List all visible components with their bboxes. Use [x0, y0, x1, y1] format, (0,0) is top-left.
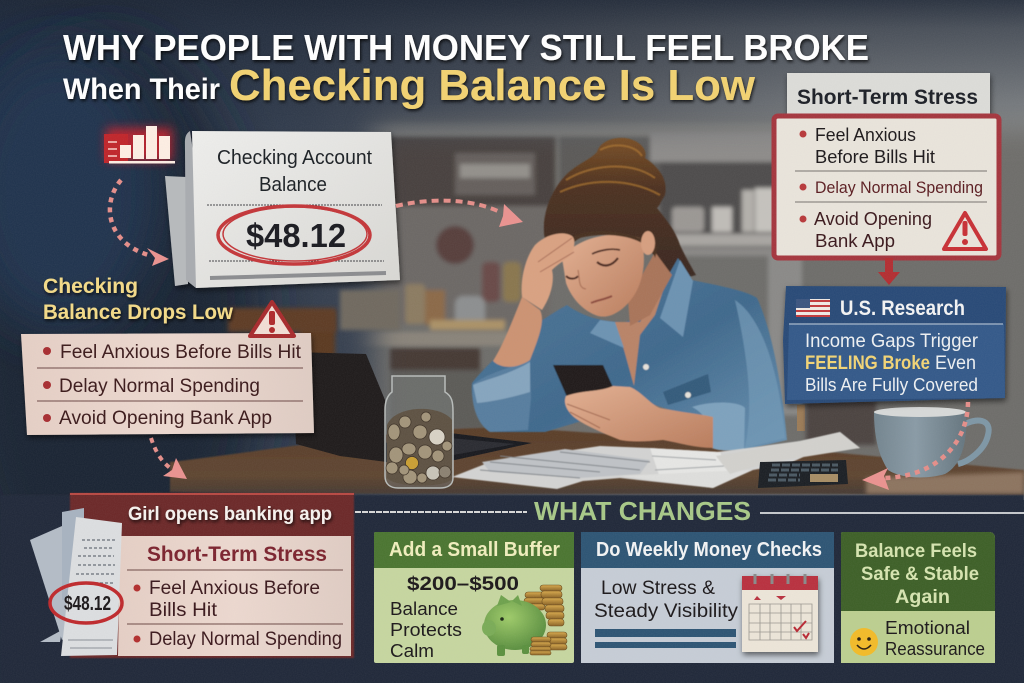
- title line 2 lead: When Their: [63, 73, 220, 106]
- receipts with circled balance: [30, 508, 122, 656]
- card: add a small buffer: Protects: [390, 620, 462, 640]
- panel: U.S. research: Even: [935, 353, 976, 374]
- panel: checking account balance receipt: Balance: [259, 174, 327, 196]
- card: do weekly money checks: [581, 532, 834, 663]
- label: Checking Account: [217, 147, 372, 169]
- card: do weekly money checks: Do Weekly Money Checks: [596, 539, 822, 561]
- card: do weekly money checks: Steady Visibility: [594, 601, 739, 622]
- heading: checking balance drops low: [43, 275, 234, 324]
- card: add a small buffer: $200–$500: [407, 574, 519, 595]
- arrow: receipt to woman: [396, 201, 523, 227]
- title line 1: WHY PEOPLE WITH MONEY STILL FEEL BROKE: [63, 27, 869, 68]
- paper curl: [185, 131, 200, 288]
- calculator: [758, 460, 848, 488]
- hand-drawn red circle: [218, 206, 370, 264]
- card: balance feels safe and stable: Again: [895, 587, 950, 608]
- card: do weekly money checks: Low Stress &: [601, 578, 715, 599]
- neck shadow: [628, 252, 672, 326]
- card: add a small buffer: [374, 532, 574, 663]
- short-term stress card: Feel Anxious Before: [149, 578, 320, 599]
- eyes, brow and mouth: [566, 249, 620, 303]
- panel: symptoms list: Delay Normal Spending: [59, 376, 260, 397]
- icon: smiley face: [850, 628, 878, 656]
- panel: U.S. research: Bills Are Fully Covered: [805, 375, 978, 395]
- heading: checking balance drops low: Balance Drops Low: [43, 301, 234, 324]
- hand and forearm holding phone: [565, 386, 713, 448]
- card: balance feels safe and stable: Balance Feels: [855, 541, 977, 562]
- panel: short-term stress list: Bank App: [815, 231, 895, 251]
- card: balance feels safe and stable: Reassurance: [885, 639, 985, 659]
- tab: short-term stress: [787, 73, 990, 115]
- ear: [641, 231, 655, 255]
- open collar skin: [614, 276, 668, 386]
- hair highlights: [560, 145, 660, 195]
- scattered bills and papers: [452, 432, 860, 489]
- shirt buttons: [643, 364, 691, 398]
- panel: short-term stress list: Before Bills Hit: [815, 147, 935, 167]
- hand on forehead: [522, 233, 574, 310]
- amount: $48.12: [246, 217, 346, 254]
- coffee mug: [874, 407, 989, 477]
- receipt paper: [192, 131, 400, 288]
- face: [562, 235, 644, 317]
- panel: short-term stress list: [774, 116, 999, 258]
- panel: U.S. research: Income Gaps Trigger: [805, 331, 979, 352]
- panel: girl opens banking app: [70, 493, 354, 658]
- panel: symptoms list: Avoid Opening Bank App: [59, 408, 272, 429]
- card: balance feels safe and stable: [841, 532, 995, 663]
- left rolled sleeve: [472, 360, 531, 432]
- front hair over forehead: [552, 231, 657, 258]
- coin jar: [385, 376, 453, 488]
- short-term stress card: Bills Hit: [149, 600, 218, 621]
- heading: checking balance drops low: Checking: [43, 275, 138, 298]
- card: balance feels safe and stable: Safe & Stable: [861, 564, 979, 585]
- back page: [165, 176, 188, 286]
- panel: checking account balance receipt: [165, 131, 400, 288]
- heading: what changes: WHAT CHANGES: [534, 496, 751, 526]
- panel: girl opens banking app: Girl opens banking app: [128, 504, 332, 525]
- short-term stress card: Short-Term Stress: [147, 543, 327, 566]
- shirt collar: [590, 260, 693, 348]
- bottom dark band: [0, 495, 1024, 683]
- laptop: [292, 352, 532, 462]
- panel: short-term stress list: Delay Normal Spending: [815, 178, 983, 197]
- tab: short-term stress: Short-Term Stress: [797, 86, 978, 109]
- panel: U.S. research: [783, 286, 1006, 404]
- card: add a small buffer: Add a Small Buffer: [389, 539, 560, 561]
- arrow: research to calculator: [862, 402, 968, 490]
- receipts with circled balance: $48.12: [64, 593, 111, 615]
- fine print: [210, 273, 386, 278]
- icon: warning triangle: [944, 213, 986, 249]
- hair back: [544, 138, 696, 282]
- icon: warning triangle: [250, 302, 294, 336]
- arrow: chart icon to receipt: [110, 180, 169, 266]
- title line 2 highlight: Checking Balance Is Low: [229, 61, 756, 110]
- icon: calendar with checkmarks: [742, 574, 818, 652]
- panel: U.S. research: FEELING Broke: [805, 353, 930, 374]
- short-term stress card: [118, 536, 351, 656]
- icon: piggy bank and coin stacks: [482, 585, 567, 656]
- card: add a small buffer: Balance: [390, 599, 458, 619]
- panel: symptoms list: Feel Anxious Before Bills Hit: [60, 342, 302, 363]
- arrow: list to bottom panel: [151, 438, 187, 479]
- phone: [553, 365, 616, 407]
- raised forearm: [493, 297, 542, 367]
- icon: glowing red bank chart: [104, 126, 175, 164]
- icon: american flag: [796, 299, 830, 317]
- panel: short-term stress list: Feel Anxious: [815, 125, 916, 145]
- title: [63, 27, 869, 110]
- chest pocket: [663, 374, 711, 405]
- panel: U.S. research: U.S. Research: [840, 297, 965, 320]
- desk table: [170, 428, 1024, 496]
- divider: [207, 205, 384, 261]
- panel: symptoms list: [21, 333, 314, 435]
- panel: short-term stress list: Avoid Opening: [814, 209, 932, 229]
- card: add a small buffer: Calm: [390, 641, 434, 661]
- right upper arm highlight: [735, 300, 785, 448]
- short-term stress card: Delay Normal Spending: [149, 629, 342, 650]
- arrow: stress to research: [878, 258, 900, 285]
- background: kitchen scene and dark vignette: [0, 0, 1024, 500]
- right sleeve cuff: [692, 403, 745, 451]
- illustration: stressed woman looking at phone: [472, 138, 787, 451]
- shirt torso: [472, 258, 787, 450]
- card: balance feels safe and stable: Emotional: [885, 618, 970, 638]
